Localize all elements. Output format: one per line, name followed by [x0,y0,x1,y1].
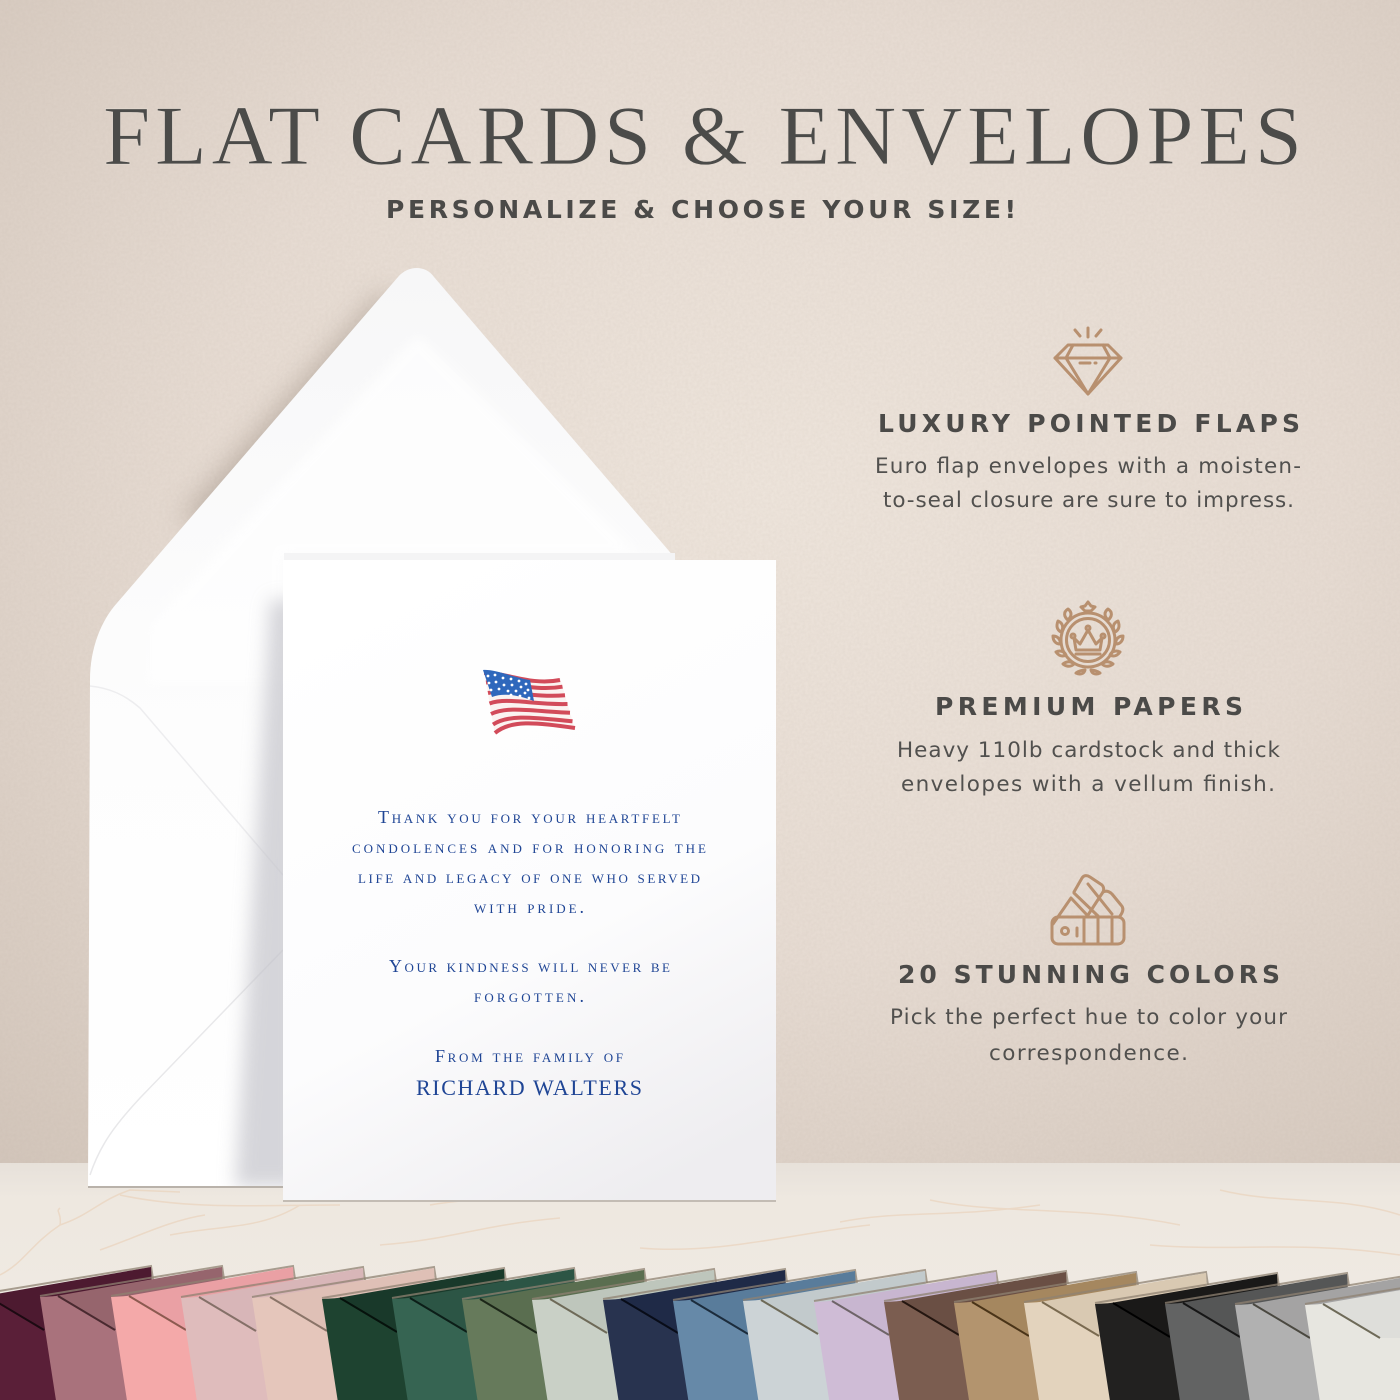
card message: Thank you for your heartfelt [378,807,680,827]
flat card [283,560,776,1202]
subtitle: PERSONALIZE & CHOOSE YOUR SIZE! [386,195,1016,224]
heading: 20 STUNNING COLORS [898,960,1280,989]
envelope colour swatches [0,1266,1400,1400]
swatch: caramel [954,1272,1144,1400]
swatch: cocoa [884,1271,1074,1400]
feature: premium papers [897,602,1281,797]
description [875,454,1301,513]
white envelope [88,268,675,1188]
swatch: silver [1235,1274,1400,1400]
card message: From the family of [435,1046,623,1066]
icon: diamond [1055,328,1121,394]
description: envelopes with a vellum finish. [901,772,1275,797]
swatch: forest green [322,1268,512,1400]
card message: forgotten. [474,986,584,1006]
swatch: slate blue [673,1270,863,1400]
card message: condolences and for honoring the [352,837,706,857]
heading: PREMIUM PAPERS [935,692,1243,721]
swatch: blush [181,1267,371,1400]
feature: luxury pointed flaps [875,328,1301,513]
card message: Your kindness will never be [389,956,670,976]
swatch: peach [252,1267,442,1400]
description [890,1005,1287,1066]
description: Pick the perfect hue to color your [890,1005,1287,1030]
icon: colour swatch fan [1052,876,1124,944]
card message: with pride. [474,897,584,917]
swatch: olive green [462,1269,652,1400]
description: to-seal closure are sure to impress. [883,488,1294,513]
swatch: ivory [1305,1274,1400,1400]
icon: crown badge [1053,602,1123,674]
description: correspondence. [989,1041,1188,1066]
heading: LUXURY POINTED FLAPS [878,409,1300,438]
feature: stunning colors [890,876,1287,1066]
swatch: cream [1024,1272,1214,1400]
swatch: coral pink [111,1266,301,1400]
swatch: navy [603,1269,793,1400]
title: FLAT CARDS & ENVELOPES [103,89,1302,183]
swatch: sage [532,1269,722,1400]
swatch: lilac [814,1271,1004,1400]
card message: life and legacy of one who served [358,867,700,887]
description: Heavy 110lb cardstock and thick [897,738,1281,763]
icon: American flag [483,670,575,735]
description [897,738,1281,797]
card message: RICHARD WALTERS [416,1075,642,1100]
marble shelf [0,1163,1400,1400]
swatch: black [1095,1273,1285,1400]
swatch: teal green [392,1268,582,1400]
card message [352,807,706,1100]
swatch: burgundy [0,1266,159,1400]
description: Euro flap envelopes with a moisten- [875,454,1301,479]
swatch: pale blue grey [743,1270,933,1400]
swatch: mauve [40,1266,230,1400]
swatch: charcoal [1165,1273,1355,1400]
